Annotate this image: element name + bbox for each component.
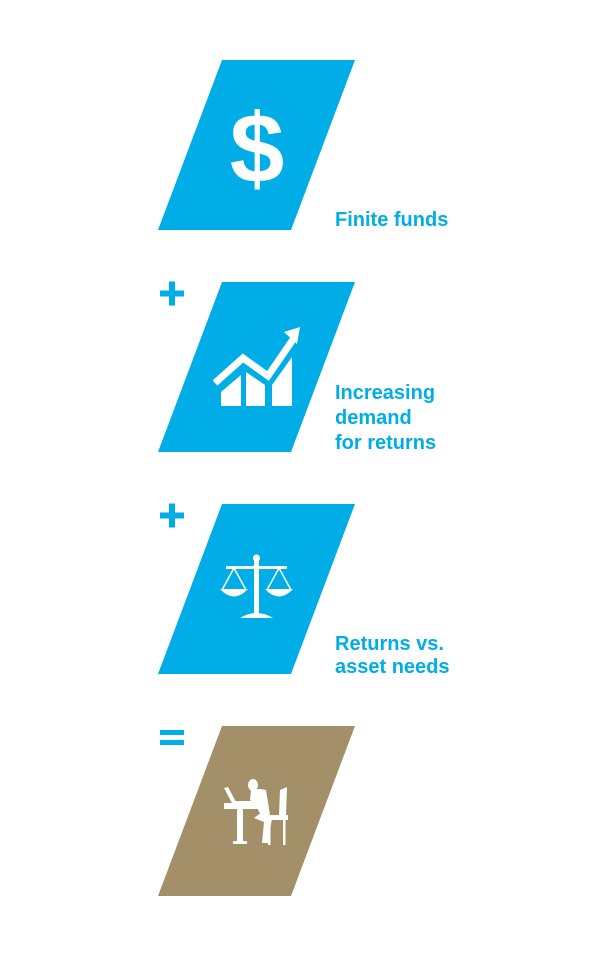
panel: returns vs asset needs	[158, 504, 450, 678]
label: increasing demand: Increasing	[335, 382, 435, 404]
label: increasing demand: demand	[335, 407, 412, 429]
panel: increasing demand	[158, 282, 436, 454]
operator: plus 2	[160, 504, 184, 528]
icon: scales	[220, 554, 293, 618]
label: finite funds: Finite funds	[335, 209, 448, 231]
operator: plus 1	[160, 282, 184, 306]
icon: stressed person at desk	[224, 779, 288, 845]
label: returns vs asset needs: Returns vs.	[335, 633, 444, 655]
icon: rising chart	[215, 327, 300, 406]
label: returns vs asset needs: asset needs	[335, 656, 450, 678]
icon: dollar: $	[230, 93, 284, 203]
panel: result stress	[158, 726, 355, 896]
label: increasing demand: for returns	[335, 432, 436, 454]
operator: equals	[160, 730, 184, 745]
panel: finite funds	[158, 60, 448, 231]
